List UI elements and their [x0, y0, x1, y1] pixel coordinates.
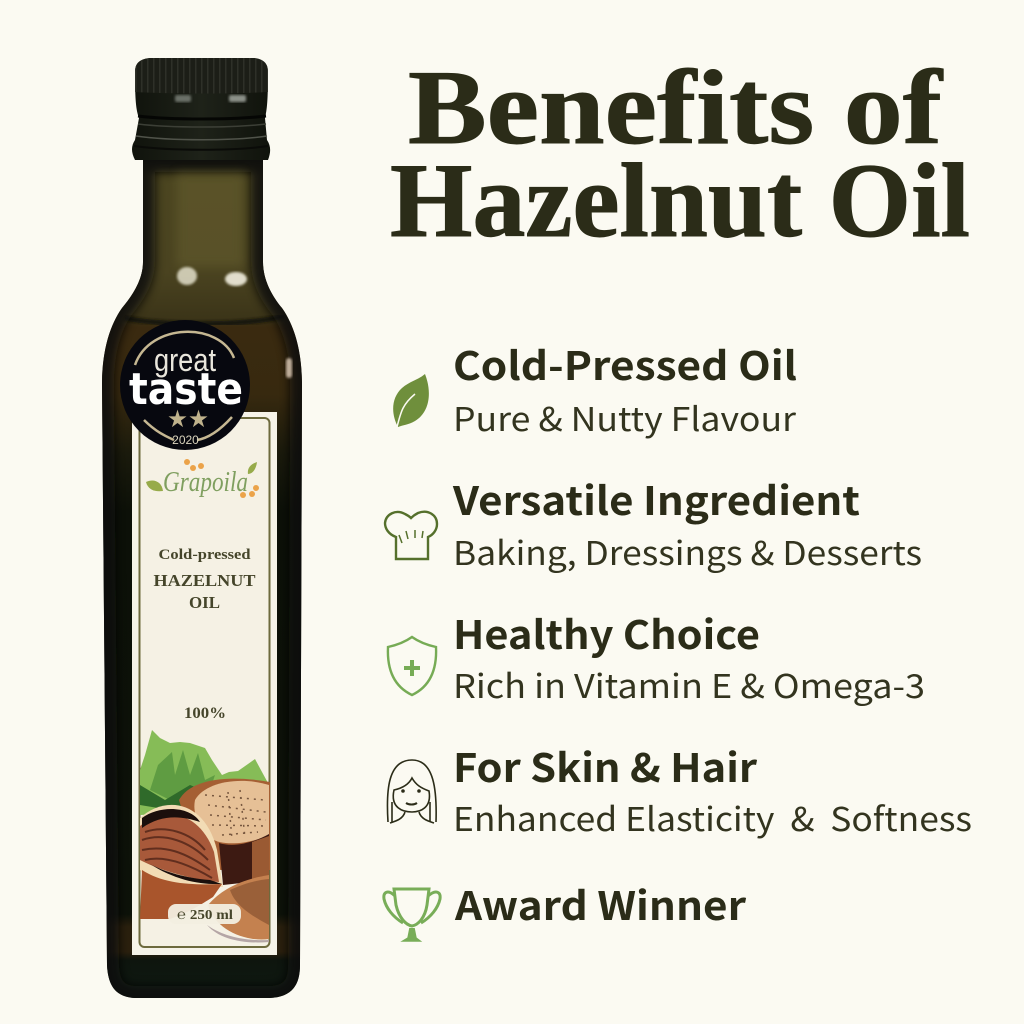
badge text: taste: taste — [129, 364, 243, 415]
volume text: ℮ 250 ml — [177, 908, 233, 923]
benefit: versatile ingredient: Versatile Ingredient — [452, 471, 860, 527]
bottle neck glass and shading — [102, 160, 302, 998]
benefit: healthy choice — [388, 605, 925, 708]
bottle glass body — [102, 160, 302, 998]
benefit: versatile ingredient — [385, 471, 922, 575]
label text: Cold-pressed: Cold-pressed — [158, 547, 251, 563]
benefit: award winner — [384, 876, 747, 941]
badge year: 2020 — [172, 433, 199, 447]
benefit: cold-pressed oil: Cold-Pressed Oil — [453, 336, 797, 392]
badge stars: ★★ — [167, 405, 209, 433]
label text: 100%: 100% — [184, 705, 226, 722]
title: Benefits of — [408, 49, 944, 166]
icon: leaf — [393, 374, 429, 427]
brand logo: Grapoila — [146, 459, 259, 498]
benefit: healthy choice: Healthy Choice — [453, 605, 760, 661]
benefit: skin and hair — [387, 738, 972, 841]
great taste award badge — [120, 320, 250, 450]
icon: shield with plus — [388, 637, 436, 695]
benefit: cold-pressed oil: Pure & Nutty Flavour — [453, 393, 796, 441]
title — [390, 49, 970, 259]
benefit: skin and hair: For Skin & Hair — [453, 738, 758, 794]
icon: chef hat — [385, 512, 437, 559]
title: Hazelnut Oil — [390, 142, 970, 259]
benefit: skin and hair: Enhanced Elasticity & Softness — [453, 793, 972, 841]
label text: Oil: OIL — [189, 593, 220, 612]
benefit: cold-pressed oil — [393, 336, 797, 441]
benefit: award winner: Award Winner — [454, 876, 747, 932]
brand logo: Grapoila: Grapoila — [163, 466, 248, 498]
paper label — [132, 412, 277, 955]
icon: woman face — [387, 760, 436, 823]
bottle cap — [132, 58, 270, 160]
label text: Hazelnut: HAZELNUT — [154, 571, 256, 590]
badge text: great: great — [154, 342, 216, 378]
hazelnut illustration — [140, 730, 270, 942]
product: hazelnut oil bottle — [102, 58, 302, 998]
benefit: healthy choice: Rich in Vitamin E & Omega-3 — [453, 660, 925, 708]
icon: trophy — [384, 889, 440, 941]
benefit: versatile ingredient: Baking, Dressings & Desserts — [453, 527, 922, 575]
